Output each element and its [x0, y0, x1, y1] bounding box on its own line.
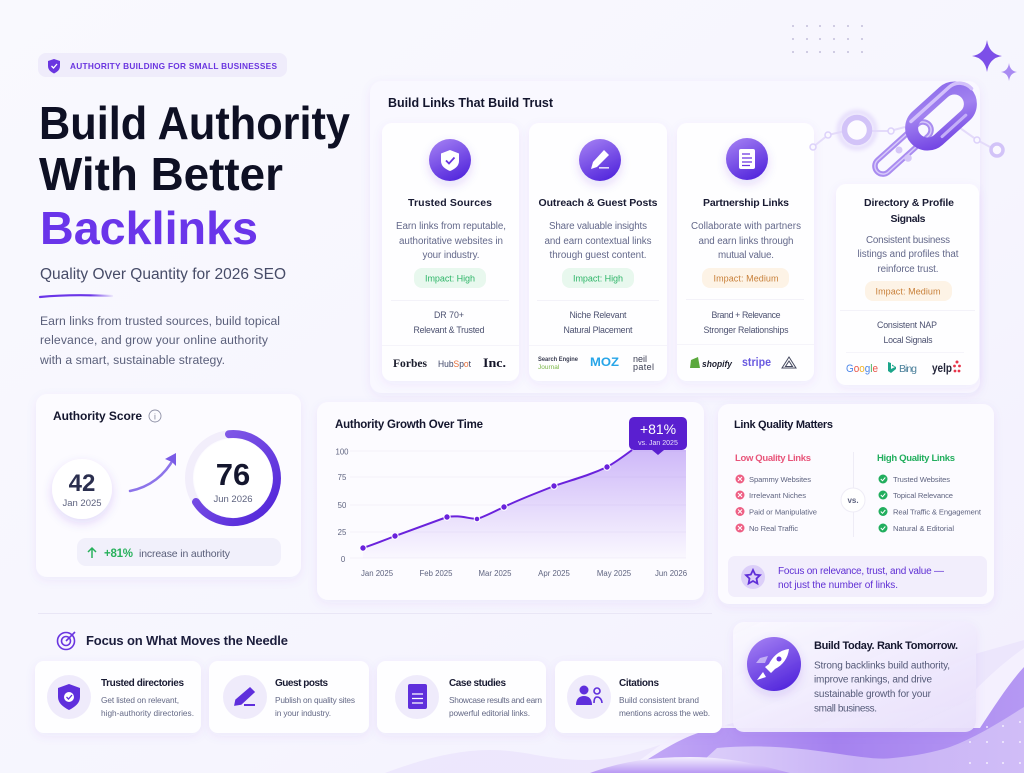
card: outreach and guest posts: Outreach & Guest Posts — [538, 197, 658, 209]
vs badge: vs. — [847, 496, 859, 505]
panel: build today call to action: sustainable growth for your — [814, 689, 932, 700]
heading: Build Links That Build Trust — [388, 96, 554, 110]
impact pill: Impact: Medium — [876, 286, 940, 296]
card: case studies: powerful editorial links. — [449, 708, 530, 718]
intro paragraph — [39, 314, 280, 367]
card: trusted directories: Trusted directories — [101, 678, 184, 689]
card: trusted sources: authoritative websites in — [399, 236, 503, 247]
icon: info — [149, 410, 161, 422]
panel: authority score — [36, 394, 301, 577]
card: case studies: Case studies — [449, 678, 506, 689]
icon: document — [726, 138, 768, 180]
x axis labels: May 2025 — [597, 569, 632, 578]
logos — [690, 355, 796, 370]
column: low quality: Low Quality Links — [735, 453, 811, 464]
column: low quality: Irrelevant Niches — [749, 491, 806, 500]
card: directory and profile signals: Consistent business — [866, 235, 950, 246]
logos: HubSpot — [438, 359, 471, 369]
card: citations: Citations — [619, 678, 659, 689]
card: directory and profile signals — [836, 184, 979, 385]
icon: info: i — [154, 412, 156, 422]
growth line — [363, 450, 632, 548]
icon: document — [395, 675, 439, 719]
y axis labels: 25 — [338, 528, 347, 537]
logos — [393, 355, 506, 370]
card: partnership links — [677, 123, 814, 381]
card: trusted sources — [382, 123, 519, 381]
card: outreach and guest posts — [529, 123, 667, 381]
panel: link quality matters — [718, 404, 994, 604]
card: trusted directories: Get listed on relevant, — [101, 695, 179, 705]
logos: Bing — [899, 363, 917, 375]
card: trusted sources: Relevant & Trusted — [414, 325, 485, 335]
logos: shopify — [702, 359, 733, 370]
increase callout: increase in authority — [139, 548, 231, 560]
bottom decorative waves — [385, 640, 1024, 773]
panel: build today call to action — [733, 622, 976, 732]
card: case studies — [377, 661, 546, 733]
impact pill: Impact: High — [573, 274, 623, 284]
icon: pencil — [579, 139, 621, 181]
x axis labels: Feb 2025 — [420, 569, 453, 578]
card: trusted directories: high-authority directories. — [101, 708, 194, 718]
column: high quality: Natural & Editorial — [893, 524, 954, 533]
icon: pencil — [223, 675, 267, 719]
tooltip — [629, 417, 687, 455]
column: low quality: Spammy Websites — [749, 475, 811, 484]
score: jan 2025: Jan 2025 — [62, 498, 102, 509]
illustration: chain links — [810, 77, 1003, 177]
intro paragraph: Earn links from trusted sources, build topical — [40, 314, 280, 328]
section heading: Focus on What Moves the Needle — [86, 633, 288, 648]
logos — [846, 360, 961, 375]
column: low quality: Paid or Manipulative — [749, 508, 817, 516]
card: directory and profile signals: Consistent NAP — [877, 320, 937, 330]
score ring: jun 2026: Jun 2026 — [213, 494, 253, 505]
logos: yelp — [932, 363, 952, 375]
panel: build today call to action: improve rankings, and drive — [814, 674, 932, 686]
panel: build today call to action: small business. — [814, 704, 877, 714]
card: partnership links: Collaborate with partners — [691, 221, 801, 232]
icon: shield — [47, 675, 91, 719]
increase callout: +81% — [104, 548, 133, 560]
badge: authority building: AUTHORITY BUILDING FOR SMALL BUSINESSES — [70, 61, 277, 71]
score: jan 2025: 42 — [69, 470, 95, 497]
card: outreach and guest posts: through guest content. — [550, 250, 646, 261]
panel: authority growth chart: Authority Growth Over Time — [335, 419, 483, 431]
card: guest posts: Publish on quality sites — [275, 695, 355, 705]
logos: Inc. — [483, 355, 506, 370]
card: trusted directories — [35, 661, 201, 733]
column: low quality — [735, 453, 817, 533]
card: outreach and guest posts: Natural Placement — [564, 325, 633, 335]
impact pill — [865, 281, 952, 301]
y axis labels: 75 — [338, 473, 347, 482]
callout: focus — [728, 556, 987, 597]
score: jan 2025 — [52, 459, 112, 519]
panel: build links that build trust — [370, 81, 980, 393]
card: guest posts: in your industry. — [275, 708, 331, 718]
panel: authority growth chart — [317, 402, 704, 600]
card: trusted sources: DR 70+ — [434, 310, 464, 320]
card: trusted sources: your industry. — [422, 250, 480, 261]
card: guest posts — [209, 661, 369, 733]
panel: authority score: Authority Score — [53, 409, 142, 423]
card: partnership links: Brand + Relevance — [712, 310, 781, 320]
logos: neil — [633, 354, 647, 364]
panel: build today call to action: Strong backlinks build authority, — [814, 660, 950, 672]
card: partnership links: mutual value. — [718, 250, 774, 261]
card: guest posts: Guest posts — [275, 678, 328, 689]
column: high quality: Topical Relevance — [893, 491, 953, 500]
icon: sparkles — [972, 40, 1017, 81]
logos: Google — [846, 363, 878, 375]
impact pill — [702, 268, 789, 288]
title: With Better — [39, 148, 283, 200]
card: directory and profile signals: Directory & Profile — [864, 197, 954, 209]
logos — [538, 354, 654, 372]
card: outreach and guest posts: Niche Relevant — [570, 310, 627, 320]
y axis labels: 100 — [335, 448, 349, 456]
card: citations: Build consistent brand — [619, 695, 699, 705]
card: outreach and guest posts: and earn contextual links — [544, 236, 652, 247]
impact pill — [414, 268, 486, 288]
y axis labels — [335, 448, 349, 564]
callout: focus: not just the number of links. — [778, 580, 898, 591]
column: high quality: Trusted Websites — [893, 475, 950, 484]
logos: Forbes — [393, 356, 427, 370]
x axis labels: Mar 2025 — [479, 569, 512, 578]
impact pill — [562, 268, 634, 288]
panel: build today call to action: Build Today. Rank Tomorrow. — [814, 640, 958, 652]
column: high quality: Real Traffic & Engagement — [893, 508, 982, 516]
title: Build Authority — [39, 97, 350, 149]
card: trusted sources: Earn links from reputable, — [396, 221, 506, 232]
card: citations: mentions across the web. — [619, 708, 710, 718]
intro paragraph: relevance, and grow your online authority — [40, 333, 269, 347]
score ring: jun 2026 — [189, 434, 277, 522]
icon: people — [567, 675, 611, 719]
badge: authority building — [38, 53, 287, 77]
subtitle underline — [40, 295, 112, 297]
column: low quality: No Real Traffic — [749, 524, 798, 533]
column: high quality — [877, 453, 982, 533]
impact pill: Impact: High — [425, 274, 475, 284]
card: trusted sources: Trusted Sources — [408, 197, 492, 209]
impact pill: Impact: Medium — [714, 274, 778, 284]
dot grid decoration — [792, 25, 863, 53]
arrow: growth — [130, 453, 176, 491]
logos: Journal — [538, 364, 560, 371]
card: partnership links: Partnership Links — [703, 197, 789, 209]
card: outreach and guest posts: Share valuable insights — [549, 221, 647, 232]
y axis labels: 50 — [338, 501, 347, 510]
card: directory and profile signals: listings and profiles that — [858, 249, 959, 260]
x axis labels: Apr 2025 — [538, 569, 570, 578]
logos: MOZ — [590, 355, 619, 369]
x axis labels: Jan 2025 — [361, 569, 394, 578]
data points — [360, 464, 610, 551]
card: directory and profile signals: Signals — [890, 213, 926, 225]
y axis labels: 0 — [341, 555, 346, 564]
card: partnership links: and earn links through — [698, 236, 794, 247]
title — [39, 97, 350, 254]
card: case studies: Showcase results and earn — [449, 695, 542, 705]
tooltip: +81% — [640, 421, 676, 437]
column: high quality: High Quality Links — [877, 453, 955, 464]
icon: shield — [429, 139, 471, 181]
icon: rocket — [747, 637, 801, 691]
callout: focus: Focus on relevance, trust, and value — — [778, 566, 944, 577]
icon: badge shield — [48, 59, 60, 74]
card: directory and profile signals: reinforce trust. — [878, 264, 938, 275]
subtitle: Quality Over Quantity for 2026 SEO — [40, 266, 286, 283]
title: Backlinks — [40, 202, 258, 254]
area under line — [363, 450, 686, 558]
card: partnership links: Stronger Relationships — [704, 325, 789, 335]
icon: target — [58, 632, 75, 650]
card: directory and profile signals: Local Signals — [884, 335, 933, 345]
logos: Search Engine — [538, 356, 578, 363]
panel: link quality matters: Link Quality Matters — [734, 419, 833, 431]
score ring: jun 2026: 76 — [216, 457, 250, 492]
intro paragraph: with a smart, sustainable strategy. — [39, 353, 225, 367]
x axis labels — [361, 569, 687, 578]
logos: patel — [633, 362, 654, 372]
vs badge — [841, 488, 865, 512]
x axis labels: Jun 2026 — [655, 569, 687, 578]
tooltip: vs. Jan 2025 — [638, 440, 678, 447]
increase callout — [77, 538, 281, 566]
card: citations — [555, 661, 722, 733]
logos: stripe — [742, 355, 771, 369]
